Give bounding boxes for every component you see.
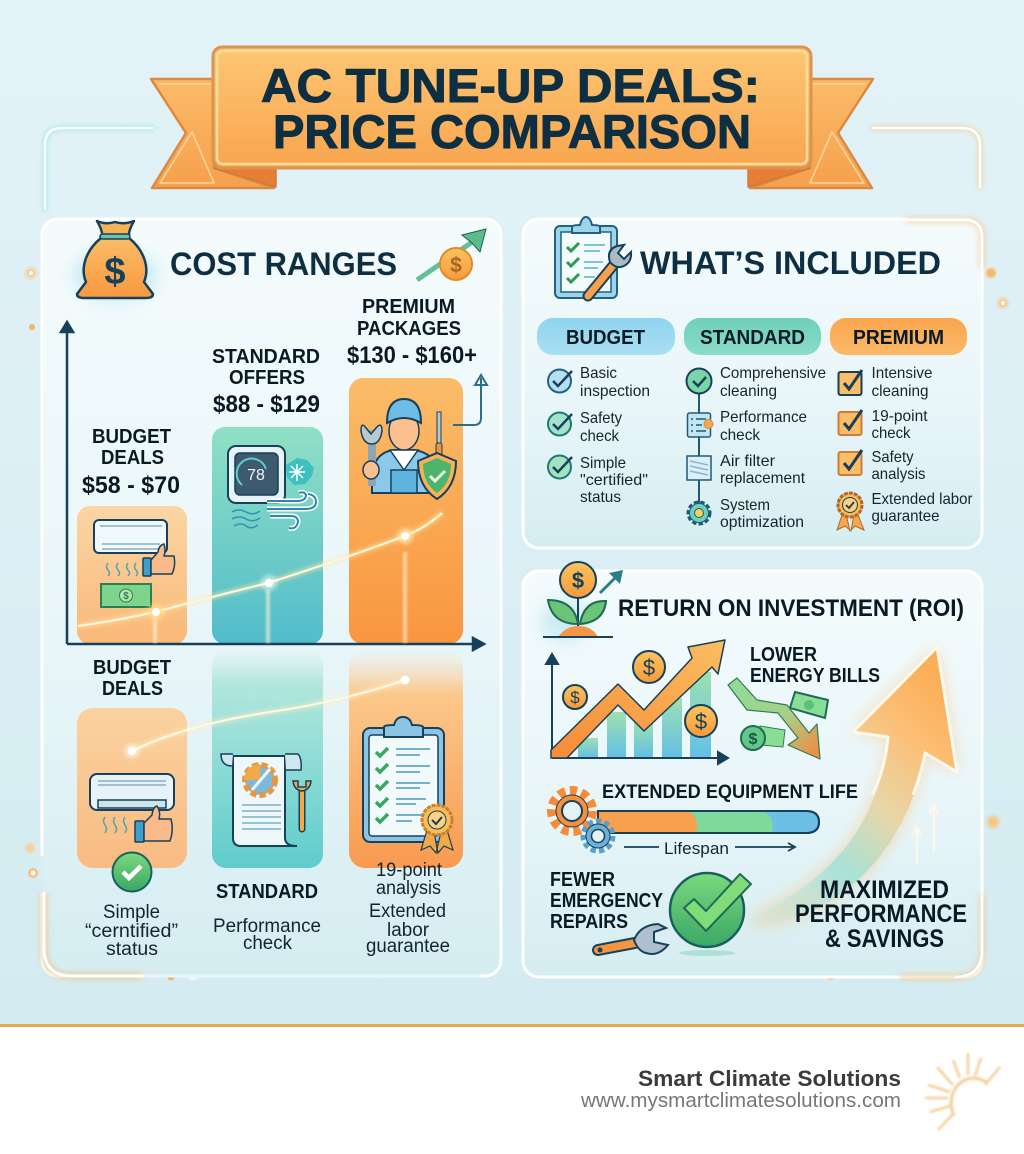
column: budget — [537, 318, 675, 506]
item: 19-point check: 19-point — [872, 408, 928, 425]
heading: cost ranges: COST RANGES — [170, 246, 397, 282]
item: basic inspection: inspection — [580, 383, 650, 400]
label: budget deals price: DEALS — [101, 447, 164, 469]
item: safety analysis: Safety — [872, 449, 914, 466]
item: safety check: check — [580, 428, 620, 445]
icon: system gear — [689, 503, 709, 523]
item: comprehensive cleaning: Comprehensive — [720, 365, 826, 382]
label: premium packages price: $130 - $160+ — [347, 342, 477, 369]
logo: sun — [925, 1053, 1000, 1130]
item: air filter replacement — [720, 453, 806, 487]
pill: standard — [684, 318, 821, 355]
coin 1 — [633, 651, 665, 683]
item: system optimization: optimization — [720, 514, 804, 531]
item: comprehensive cleaning — [720, 365, 826, 400]
chart: rising returns — [546, 640, 728, 764]
glow trend line: lower — [125, 676, 410, 758]
text: standard performance check — [213, 881, 321, 954]
label: premium packages price: PACKAGES — [357, 318, 461, 340]
item: simple certified status: Simple — [580, 455, 626, 472]
glowing frame corners and sparkles — [25, 128, 1008, 980]
icon: wrench — [598, 924, 668, 954]
label: maximized performance and savings — [795, 876, 967, 953]
item: system optimization: System — [720, 497, 770, 514]
item: intensive cleaning — [872, 365, 933, 400]
item: safety check — [580, 410, 622, 445]
footer — [0, 1024, 1024, 1154]
icon: coin with rising arrow: $ — [450, 254, 462, 277]
item: safety analysis — [872, 449, 926, 483]
label: budget deals lower: BUDGET — [93, 657, 171, 679]
icon: money plant: $ — [572, 568, 584, 593]
item: comprehensive cleaning: cleaning — [720, 383, 777, 400]
item: safety analysis: analysis — [872, 466, 926, 483]
text: simple certified status: status — [106, 939, 158, 960]
icon: check circle teal — [548, 412, 572, 436]
item: basic inspection — [580, 365, 650, 400]
item: intensive cleaning: Intensive — [872, 365, 933, 382]
lifespan arrow label — [624, 839, 795, 858]
item: extended labor guarantee: Extended labor — [872, 491, 973, 508]
icon: thermostat with airflow: 78 — [247, 467, 265, 484]
label: extended equipment life: EXTENDED EQUIPMENT LIFE — [602, 782, 858, 803]
icon: check box 1 — [838, 370, 862, 395]
icon: AC unit with thumbs up and bill: $ — [123, 591, 129, 602]
website url: www.mysmartclimatesolutions.com — [580, 1090, 901, 1112]
text: simple certified status: Simple — [103, 902, 160, 923]
panel: cost ranges — [42, 219, 501, 976]
coin 1: $ — [643, 655, 655, 680]
icon: check circle — [686, 368, 712, 394]
label: standard offers price: OFFERS — [229, 367, 305, 389]
icon: clipboard with wrench — [555, 217, 631, 298]
label: lower energy bills — [750, 644, 880, 687]
item: performance check: Performance — [720, 409, 807, 426]
panel: what's included — [523, 217, 982, 548]
icon: performance checklist — [688, 413, 713, 437]
label: budget deals lower — [93, 657, 171, 700]
icon: big green check — [670, 873, 751, 956]
left ribbon tail — [151, 79, 274, 188]
pill: premium — [830, 318, 967, 355]
glow trend line: upper — [78, 513, 442, 643]
label: budget deals price — [82, 426, 180, 499]
pill: budget — [537, 318, 675, 355]
item: extended labor guarantee: guarantee — [872, 508, 940, 525]
title text: PRICE COMPARISON — [273, 105, 751, 158]
heading: return on investment: RETURN ON INVESTMENT (ROI) — [618, 595, 964, 622]
icon: green check badge — [112, 852, 152, 892]
bar: standard offers — [212, 427, 323, 644]
item: simple certified status — [580, 455, 648, 506]
heading: what's included: WHAT’S INCLUDED — [640, 245, 941, 281]
bar: budget deals — [77, 506, 187, 644]
text: premium analysis and guarantee: Extended — [369, 901, 446, 922]
item: intensive cleaning: cleaning — [872, 383, 928, 400]
item: simple certified status: "certified" — [580, 472, 648, 489]
lifespan arrow label: Lifespan — [664, 839, 729, 858]
item: simple certified status: status — [580, 489, 621, 506]
label: standard offers price — [212, 346, 320, 418]
lifespan bar — [598, 811, 819, 833]
item: performance check — [720, 409, 807, 444]
icon: coin with rising arrow — [417, 229, 486, 280]
label: maximized performance and savings: & SAVINGS — [825, 925, 944, 953]
pill: premium: PREMIUM — [853, 327, 944, 349]
label: budget deals price: BUDGET — [92, 426, 171, 448]
text: simple certified status: “cerntified” — [85, 921, 178, 942]
icon: money plant — [541, 562, 623, 642]
item: 19-point check: check — [872, 425, 911, 442]
text: premium analysis and guarantee: analysis — [376, 878, 441, 899]
icon: money bag — [73, 221, 157, 301]
item: air filter replacement: Air filter — [720, 453, 776, 470]
icon: falling cost arrow with money: $ — [749, 731, 758, 748]
text: simple certified status — [85, 902, 178, 960]
text: premium analysis and guarantee: 19-point — [376, 860, 443, 881]
label: fewer emergency repairs — [550, 869, 664, 933]
label: budget deals price: $58 - $70 — [82, 472, 180, 499]
text: premium analysis and guarantee: guarantee — [366, 936, 450, 957]
lower columns — [77, 650, 463, 868]
label: lower energy bills: ENERGY BILLS — [750, 665, 880, 687]
item: extended labor guarantee — [872, 491, 973, 525]
text: standard performance check: check — [243, 933, 292, 954]
text: standard performance check: Performance — [213, 916, 321, 937]
label: maximized performance and savings: PERFORMANCE — [795, 900, 967, 928]
panel: return on investment — [523, 562, 982, 977]
pill: standard: STANDARD — [700, 327, 805, 349]
label: maximized performance and savings: MAXIMIZED — [820, 876, 949, 904]
label: fewer emergency repairs: FEWER — [550, 869, 615, 891]
icon: service scroll with gear and wrench — [221, 754, 311, 846]
label: premium packages price — [347, 296, 477, 369]
icon: falling cost arrow with money — [728, 678, 828, 759]
bottom-left orange glow — [44, 893, 142, 976]
chart axes — [61, 322, 484, 650]
company name: Smart Climate Solutions — [638, 1066, 901, 1091]
icon: check box 3 — [838, 450, 862, 475]
item: air filter replacement: replacement — [720, 470, 806, 487]
icon: technician with wrench, screwdriver and shield — [361, 399, 456, 499]
icon: checklist clipboard with badge — [363, 717, 453, 853]
item: system optimization — [720, 497, 804, 531]
label: budget deals lower: DEALS — [102, 678, 163, 700]
icon: gears — [552, 791, 612, 850]
title banner — [151, 47, 873, 188]
title text — [261, 59, 760, 158]
coin 3 — [685, 705, 717, 737]
bar: premium packages — [349, 378, 463, 644]
label: standard offers price: $88 - $129 — [213, 391, 320, 418]
icon: AC unit with thumbs up — [90, 774, 174, 842]
label: premium packages price: PREMIUM — [362, 296, 455, 318]
column: premium — [830, 318, 973, 531]
icon: thermostat with airflow — [228, 446, 316, 528]
item: 19-point check — [872, 408, 928, 442]
item: performance check: check — [720, 427, 761, 444]
coin 3: $ — [695, 709, 707, 734]
label: standard offers price: STANDARD — [212, 346, 320, 368]
icon: check circle green — [548, 456, 572, 478]
big growth arrow — [747, 647, 957, 926]
icon: check circle blue — [548, 370, 572, 392]
title text: AC TUNE-UP DEALS: — [261, 59, 760, 112]
icon: air filter — [687, 456, 711, 480]
pill: budget: BUDGET — [566, 327, 645, 349]
coin 2: $ — [570, 688, 580, 707]
text: premium analysis and guarantee — [366, 860, 450, 957]
column: standard — [684, 318, 826, 531]
text: premium analysis and guarantee: labor — [387, 920, 430, 941]
arrow: premium upgrade — [453, 375, 487, 425]
icon: guarantee ribbon — [837, 493, 864, 531]
label: lower energy bills: LOWER — [750, 644, 817, 666]
icon: money bag: $ — [104, 251, 126, 293]
label: fewer emergency repairs: EMERGENCY — [550, 890, 664, 912]
item: basic inspection: Basic — [580, 365, 617, 382]
coin 2 — [563, 685, 587, 709]
item: safety check: Safety — [580, 410, 622, 427]
right ribbon tail — [750, 79, 873, 188]
icon: check box 2 — [838, 410, 862, 435]
text: standard performance check: STANDARD — [216, 881, 318, 903]
label: fewer emergency repairs: REPAIRS — [550, 911, 628, 933]
